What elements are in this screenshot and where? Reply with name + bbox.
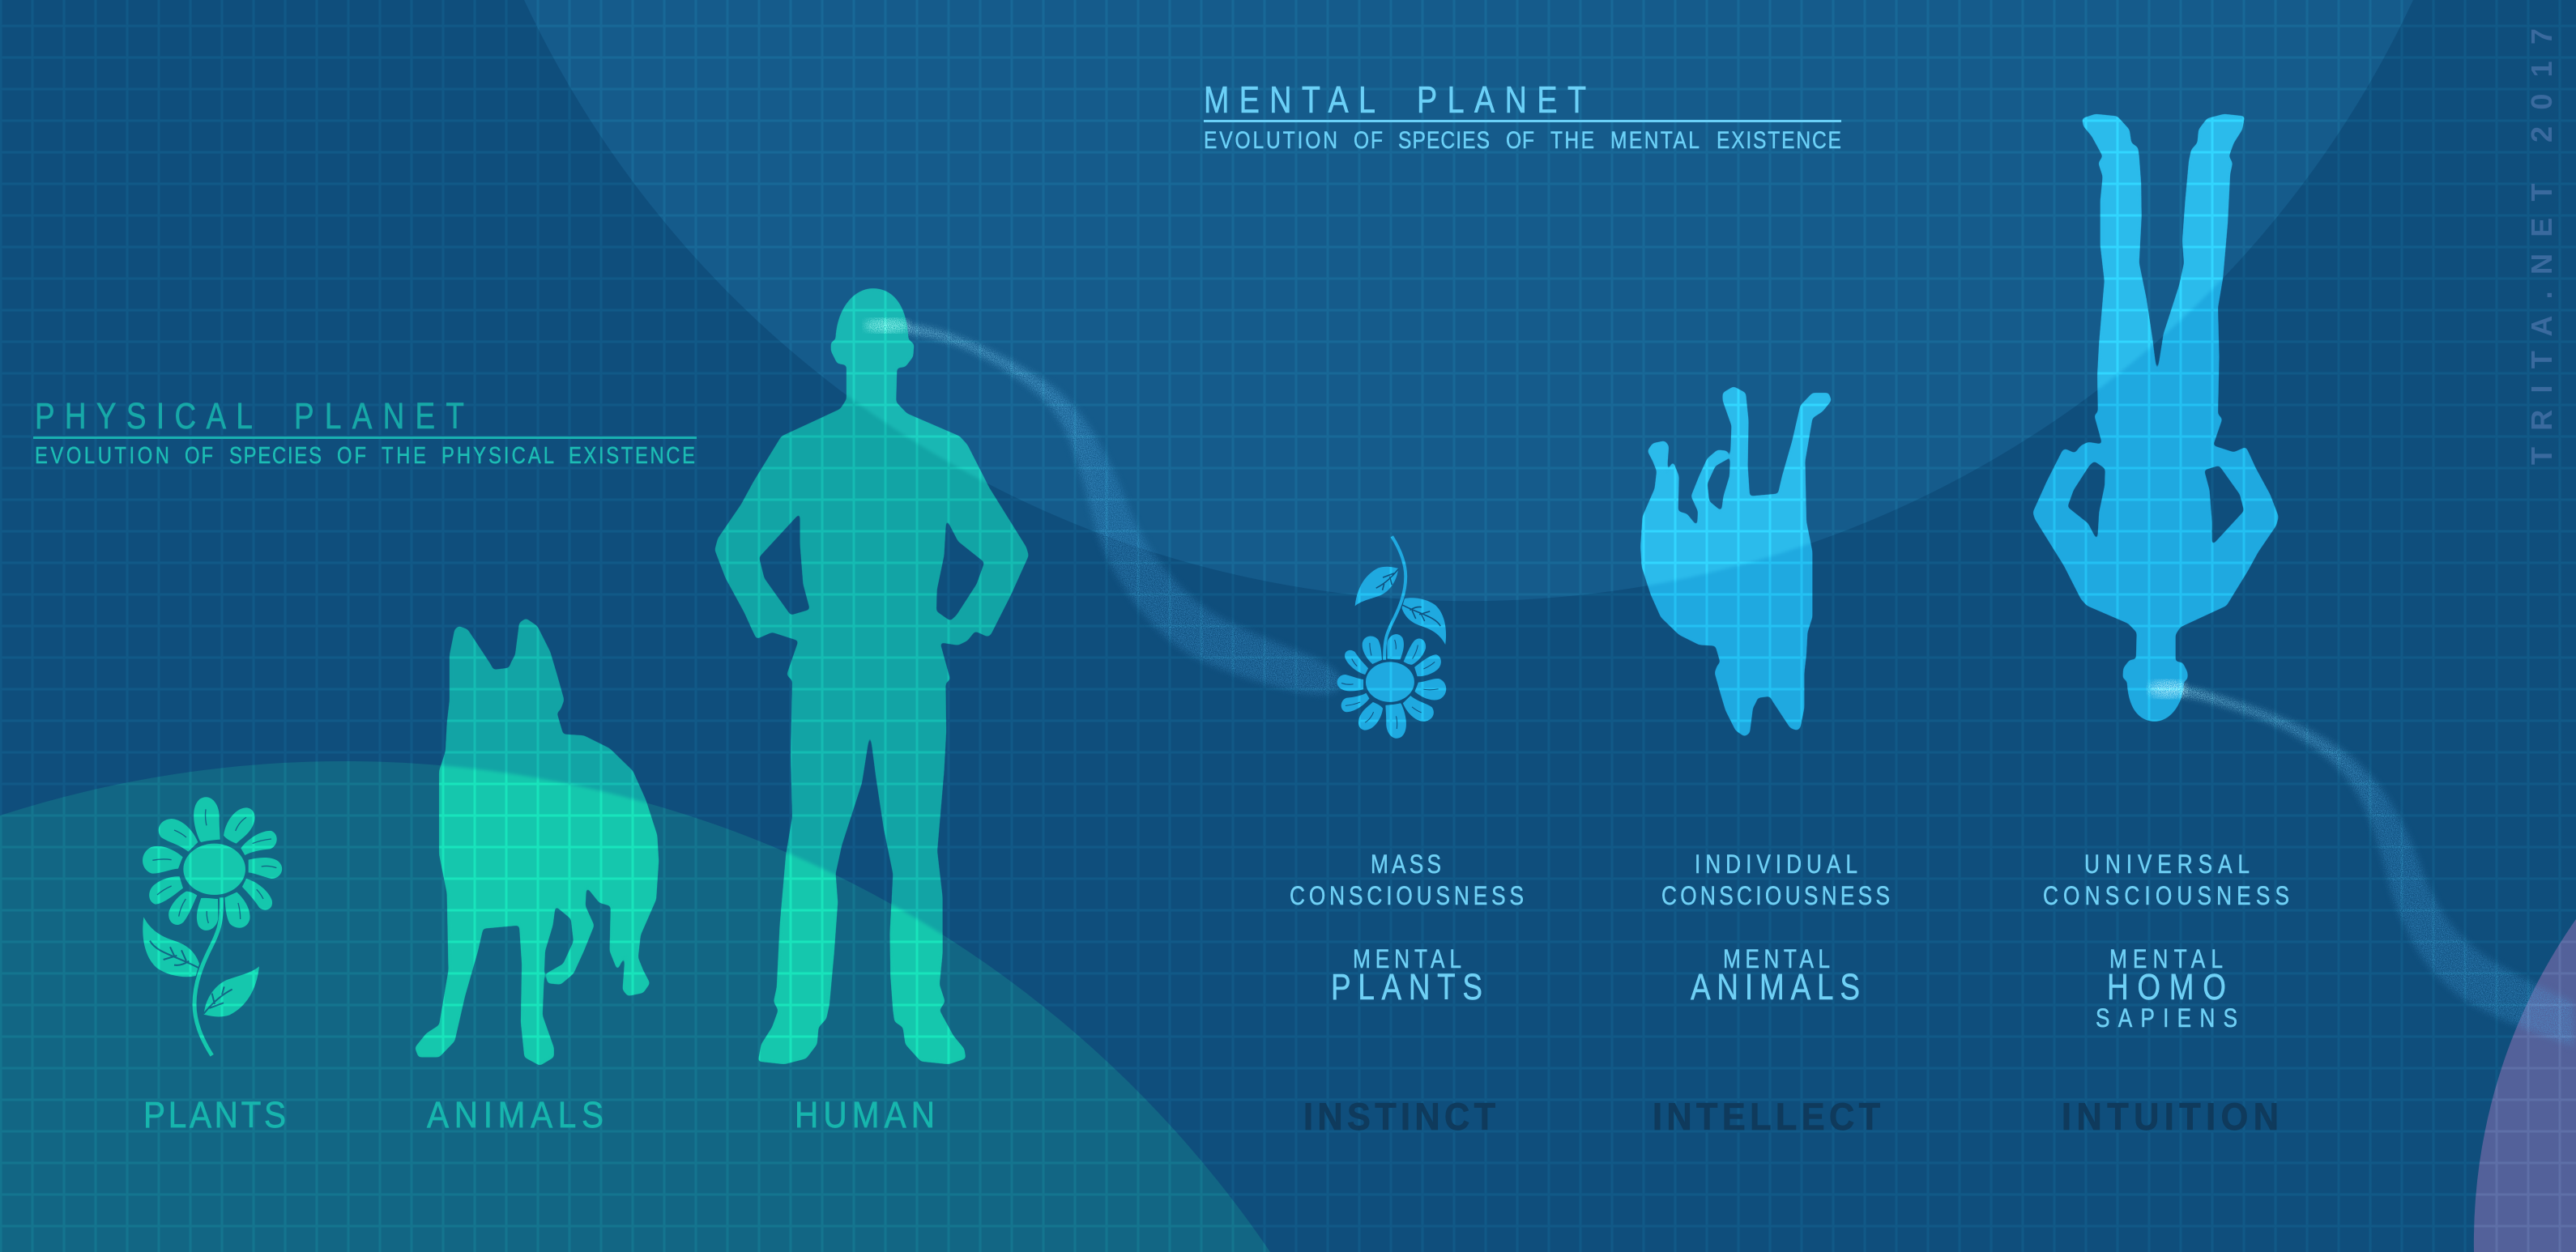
column: mental homo sapiens text: SAPIENS [2096, 1005, 2237, 1033]
silhouette: mental animal dog inverted [1640, 386, 1832, 737]
label: animals: ANIMALS [427, 1095, 603, 1136]
heading: mental planet: MENTAL [1204, 79, 1375, 121]
credit: trita.net 2017: TRITA.NET 2017 [2525, 28, 2558, 465]
label: intellect: INTELLECT [1653, 1095, 1880, 1138]
glow on human head [864, 318, 910, 333]
silhouette: physical human [714, 288, 1029, 1064]
heading: physical planet: EVOLUTION [35, 442, 169, 469]
label: intuition: INTUITION [2062, 1095, 2279, 1138]
column: mental plants text: PLANTS [1331, 967, 1482, 1007]
heading: physical planet: OF [185, 442, 213, 469]
silhouette: physical animal dog [415, 618, 659, 1066]
trail: human to mental plant [867, 322, 1341, 694]
column: mental homo sapiens text: MENTAL [2109, 946, 2223, 974]
icon: physical plant flower [143, 797, 282, 1055]
heading: physical planet [33, 396, 697, 469]
icon: mental plant flower inverted [1337, 536, 1446, 739]
label: instinct: INSTINCT [1303, 1095, 1495, 1138]
label: plants: PLANTS [143, 1095, 286, 1136]
heading: mental planet: EVOLUTION [1204, 126, 1337, 154]
heading: mental planet: OF [1506, 126, 1534, 154]
column: mental animals text: MENTAL [1723, 946, 1830, 974]
heading: physical planet: PLANET [294, 396, 464, 436]
column: mental animals text: ANIMALS [1691, 967, 1860, 1007]
column: mental animals text: INDIVIDUAL [1695, 851, 1857, 879]
heading: mental planet: PLANET [1417, 79, 1586, 121]
trail: mental homo sapiens to purple planet [2154, 683, 2574, 1046]
label: human: HUMAN [795, 1095, 935, 1136]
column: mental plants text: MASS [1371, 851, 1441, 879]
column: mental homo sapiens text: HOMO [2107, 967, 2226, 1007]
heading: mental planet [1204, 79, 1841, 154]
heading: mental planet: THE [1550, 126, 1594, 154]
column: mental plants text: CONSCIOUSNESS [1290, 883, 1524, 911]
column: mental homo sapiens text: UNIVERSAL [2084, 851, 2250, 879]
glow on inverted human head [2148, 680, 2187, 698]
heading: mental planet: MENTAL [1610, 126, 1700, 154]
heading: physical planet: PHYSICAL [35, 396, 253, 436]
column: mental plants text: MENTAL [1353, 946, 1461, 974]
purple planet circle [2474, 919, 2576, 1252]
heading: mental planet: EXISTENCE [1717, 126, 1841, 154]
heading: physical planet: EXISTENCE [569, 442, 695, 469]
heading: physical planet: SPECIES [229, 442, 322, 469]
physical planet circle [0, 761, 1270, 1252]
column: mental homo sapiens text: CONSCIOUSNESS [2043, 883, 2289, 911]
silhouette: mental human inverted [2032, 114, 2279, 722]
mental planet circle [524, 0, 2413, 601]
column: mental homo sapiens text [2043, 851, 2289, 1033]
heading: mental planet: SPECIES [1398, 126, 1490, 154]
heading: mental planet: OF [1354, 126, 1383, 154]
column: mental animals text: CONSCIOUSNESS [1661, 883, 1890, 911]
column: mental plants text [1290, 851, 1524, 1007]
heading: physical planet: OF [337, 442, 366, 469]
heading: physical planet: THE [382, 442, 426, 469]
column: mental animals text [1661, 851, 1890, 1007]
heading: physical planet: PHYSICAL [441, 442, 554, 469]
